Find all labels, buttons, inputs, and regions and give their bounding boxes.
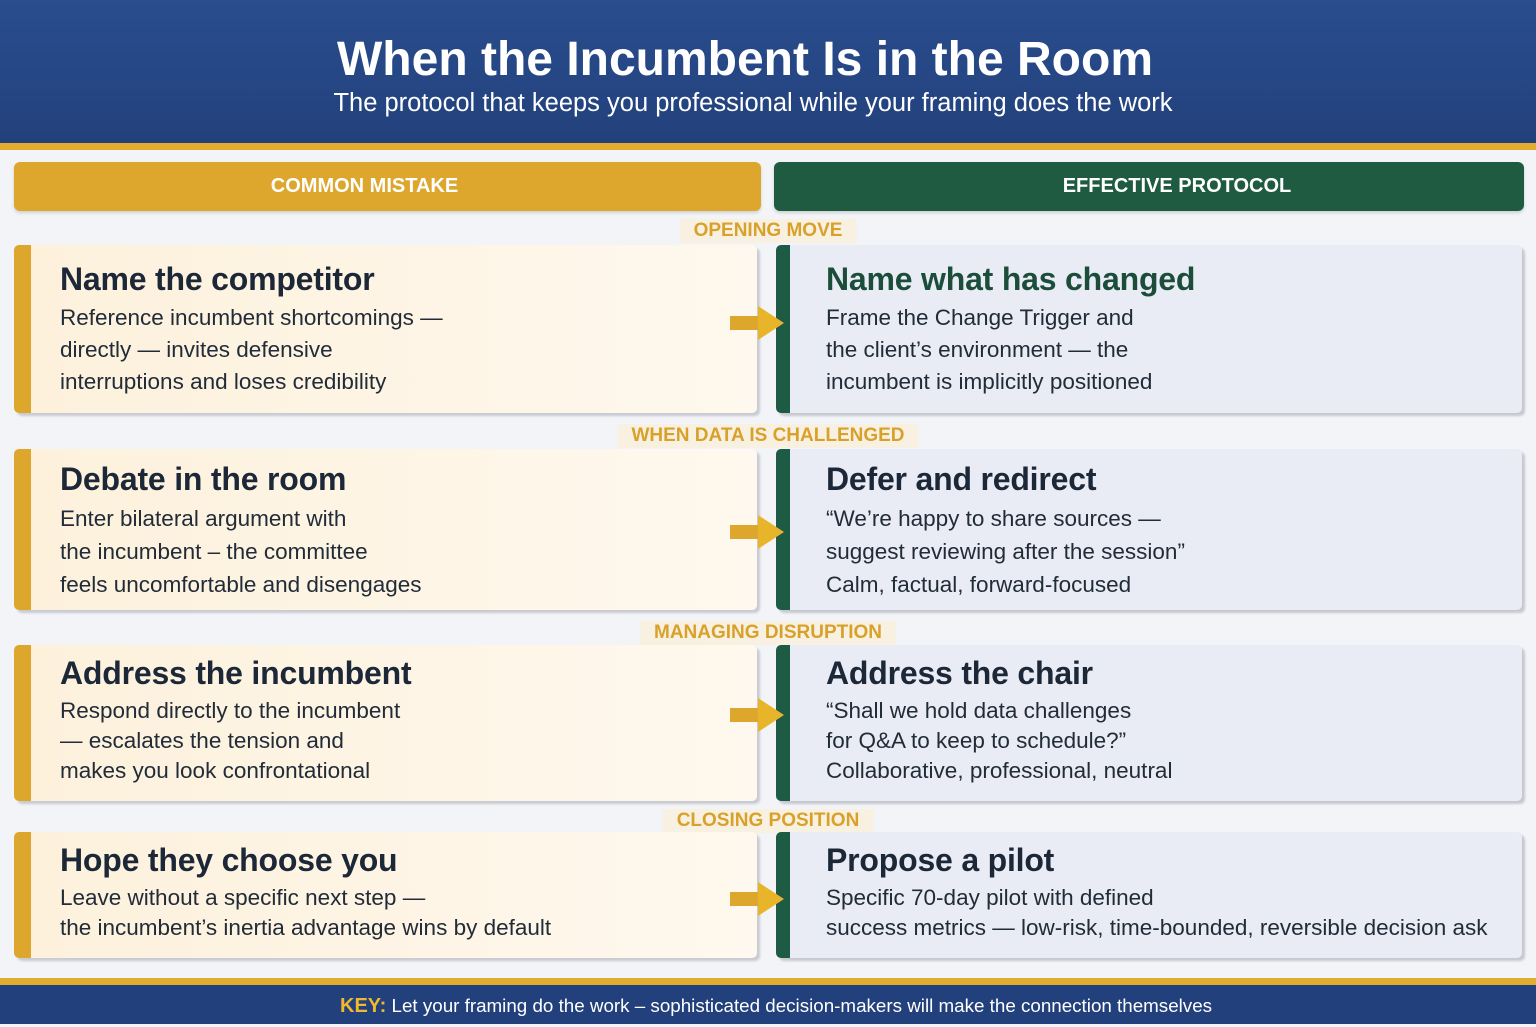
card: defer and redirect: Defer and redirect — [826, 461, 1096, 497]
card: name what has changed: Name what has changed — [826, 261, 1195, 297]
card: name the competitor: interruptions and loses credibility — [60, 369, 386, 394]
card: debate in the room — [14, 449, 757, 610]
card: address the incumbent: — escalates the tension and — [60, 728, 344, 753]
column header: common mistake — [14, 162, 761, 211]
card: debate in the room: Enter bilateral argument with — [60, 506, 346, 531]
arrow 3 — [730, 698, 784, 732]
card: hope they choose you — [14, 832, 757, 958]
section label: opening move: OPENING MOVE — [694, 220, 842, 241]
card: debate in the room: Debate in the room — [60, 461, 346, 497]
card: address the incumbent: Respond directly to the incumbent — [60, 698, 400, 723]
card: name the competitor: directly — invites defensive — [60, 337, 333, 362]
card: defer and redirect — [776, 449, 1522, 610]
card: defer and redirect: “We’re happy to share sources — — [826, 506, 1161, 531]
card: propose a pilot — [776, 832, 1522, 958]
header banner — [0, 0, 1536, 143]
card: propose a pilot: success metrics — low-risk, time-bounded, reversible decision ask — [826, 915, 1487, 940]
card: debate in the room: the incumbent – the committee — [60, 539, 368, 564]
card: name the competitor — [14, 245, 757, 413]
column header: effective protocol: EFFECTIVE PROTOCOL — [1063, 175, 1291, 197]
card: address the chair: for Q&A to keep to schedule?” — [826, 728, 1126, 753]
card: debate in the room: feels uncomfortable and disengages — [60, 572, 422, 597]
arrow 1 — [730, 306, 784, 340]
card: hope they choose you: Leave without a specific next step — — [60, 885, 425, 910]
arrow 2 — [730, 515, 784, 549]
card: propose a pilot: Propose a pilot — [826, 842, 1054, 878]
card: name what has changed: incumbent is implicitly positioned — [826, 369, 1152, 394]
card: address the incumbent: makes you look confrontational — [60, 758, 370, 783]
column header: effective protocol — [774, 162, 1524, 211]
card: address the chair — [776, 645, 1522, 801]
card: defer and redirect: Calm, factual, forward-focused — [826, 572, 1131, 597]
card: propose a pilot: Specific 70-day pilot with defined — [826, 885, 1154, 910]
column header: common mistake: COMMON MISTAKE — [271, 175, 458, 197]
footer key: KEY: Let your framing do the work – sophisticated decision-makers will make the connection themselves — [340, 995, 1212, 1017]
card: name the competitor: Name the competitor — [60, 261, 374, 297]
section label: closing position: CLOSING POSITION — [677, 810, 859, 831]
section label: managing disruption: MANAGING DISRUPTION — [654, 622, 882, 643]
card: defer and redirect: suggest reviewing after the session” — [826, 539, 1185, 564]
card: address the incumbent: Address the incumbent — [60, 655, 411, 691]
card: address the chair: Address the chair — [826, 655, 1093, 691]
arrow 4 — [730, 882, 784, 916]
card: address the incumbent — [14, 645, 757, 801]
section label: when data is challenged: WHEN DATA IS CHALLENGED — [631, 425, 905, 446]
card: name what has changed — [776, 245, 1522, 413]
card: hope they choose you: Hope they choose you — [60, 842, 397, 878]
footer key — [0, 985, 1536, 1024]
card: name the competitor: Reference incumbent shortcomings — — [60, 305, 443, 330]
card: name what has changed: the client’s environment — the — [826, 337, 1128, 362]
card: name what has changed: Frame the Change Trigger and — [826, 305, 1134, 330]
card: address the chair: Collaborative, professional, neutral — [826, 758, 1172, 783]
card: hope they choose you: the incumbent’s inertia advantage wins by default — [60, 915, 551, 940]
card: address the chair: “Shall we hold data challenges — [826, 698, 1131, 723]
subtitle: The protocol that keeps you professional while your framing does the work — [333, 89, 1173, 117]
title: When the Incumbent Is in the Room — [337, 33, 1153, 86]
